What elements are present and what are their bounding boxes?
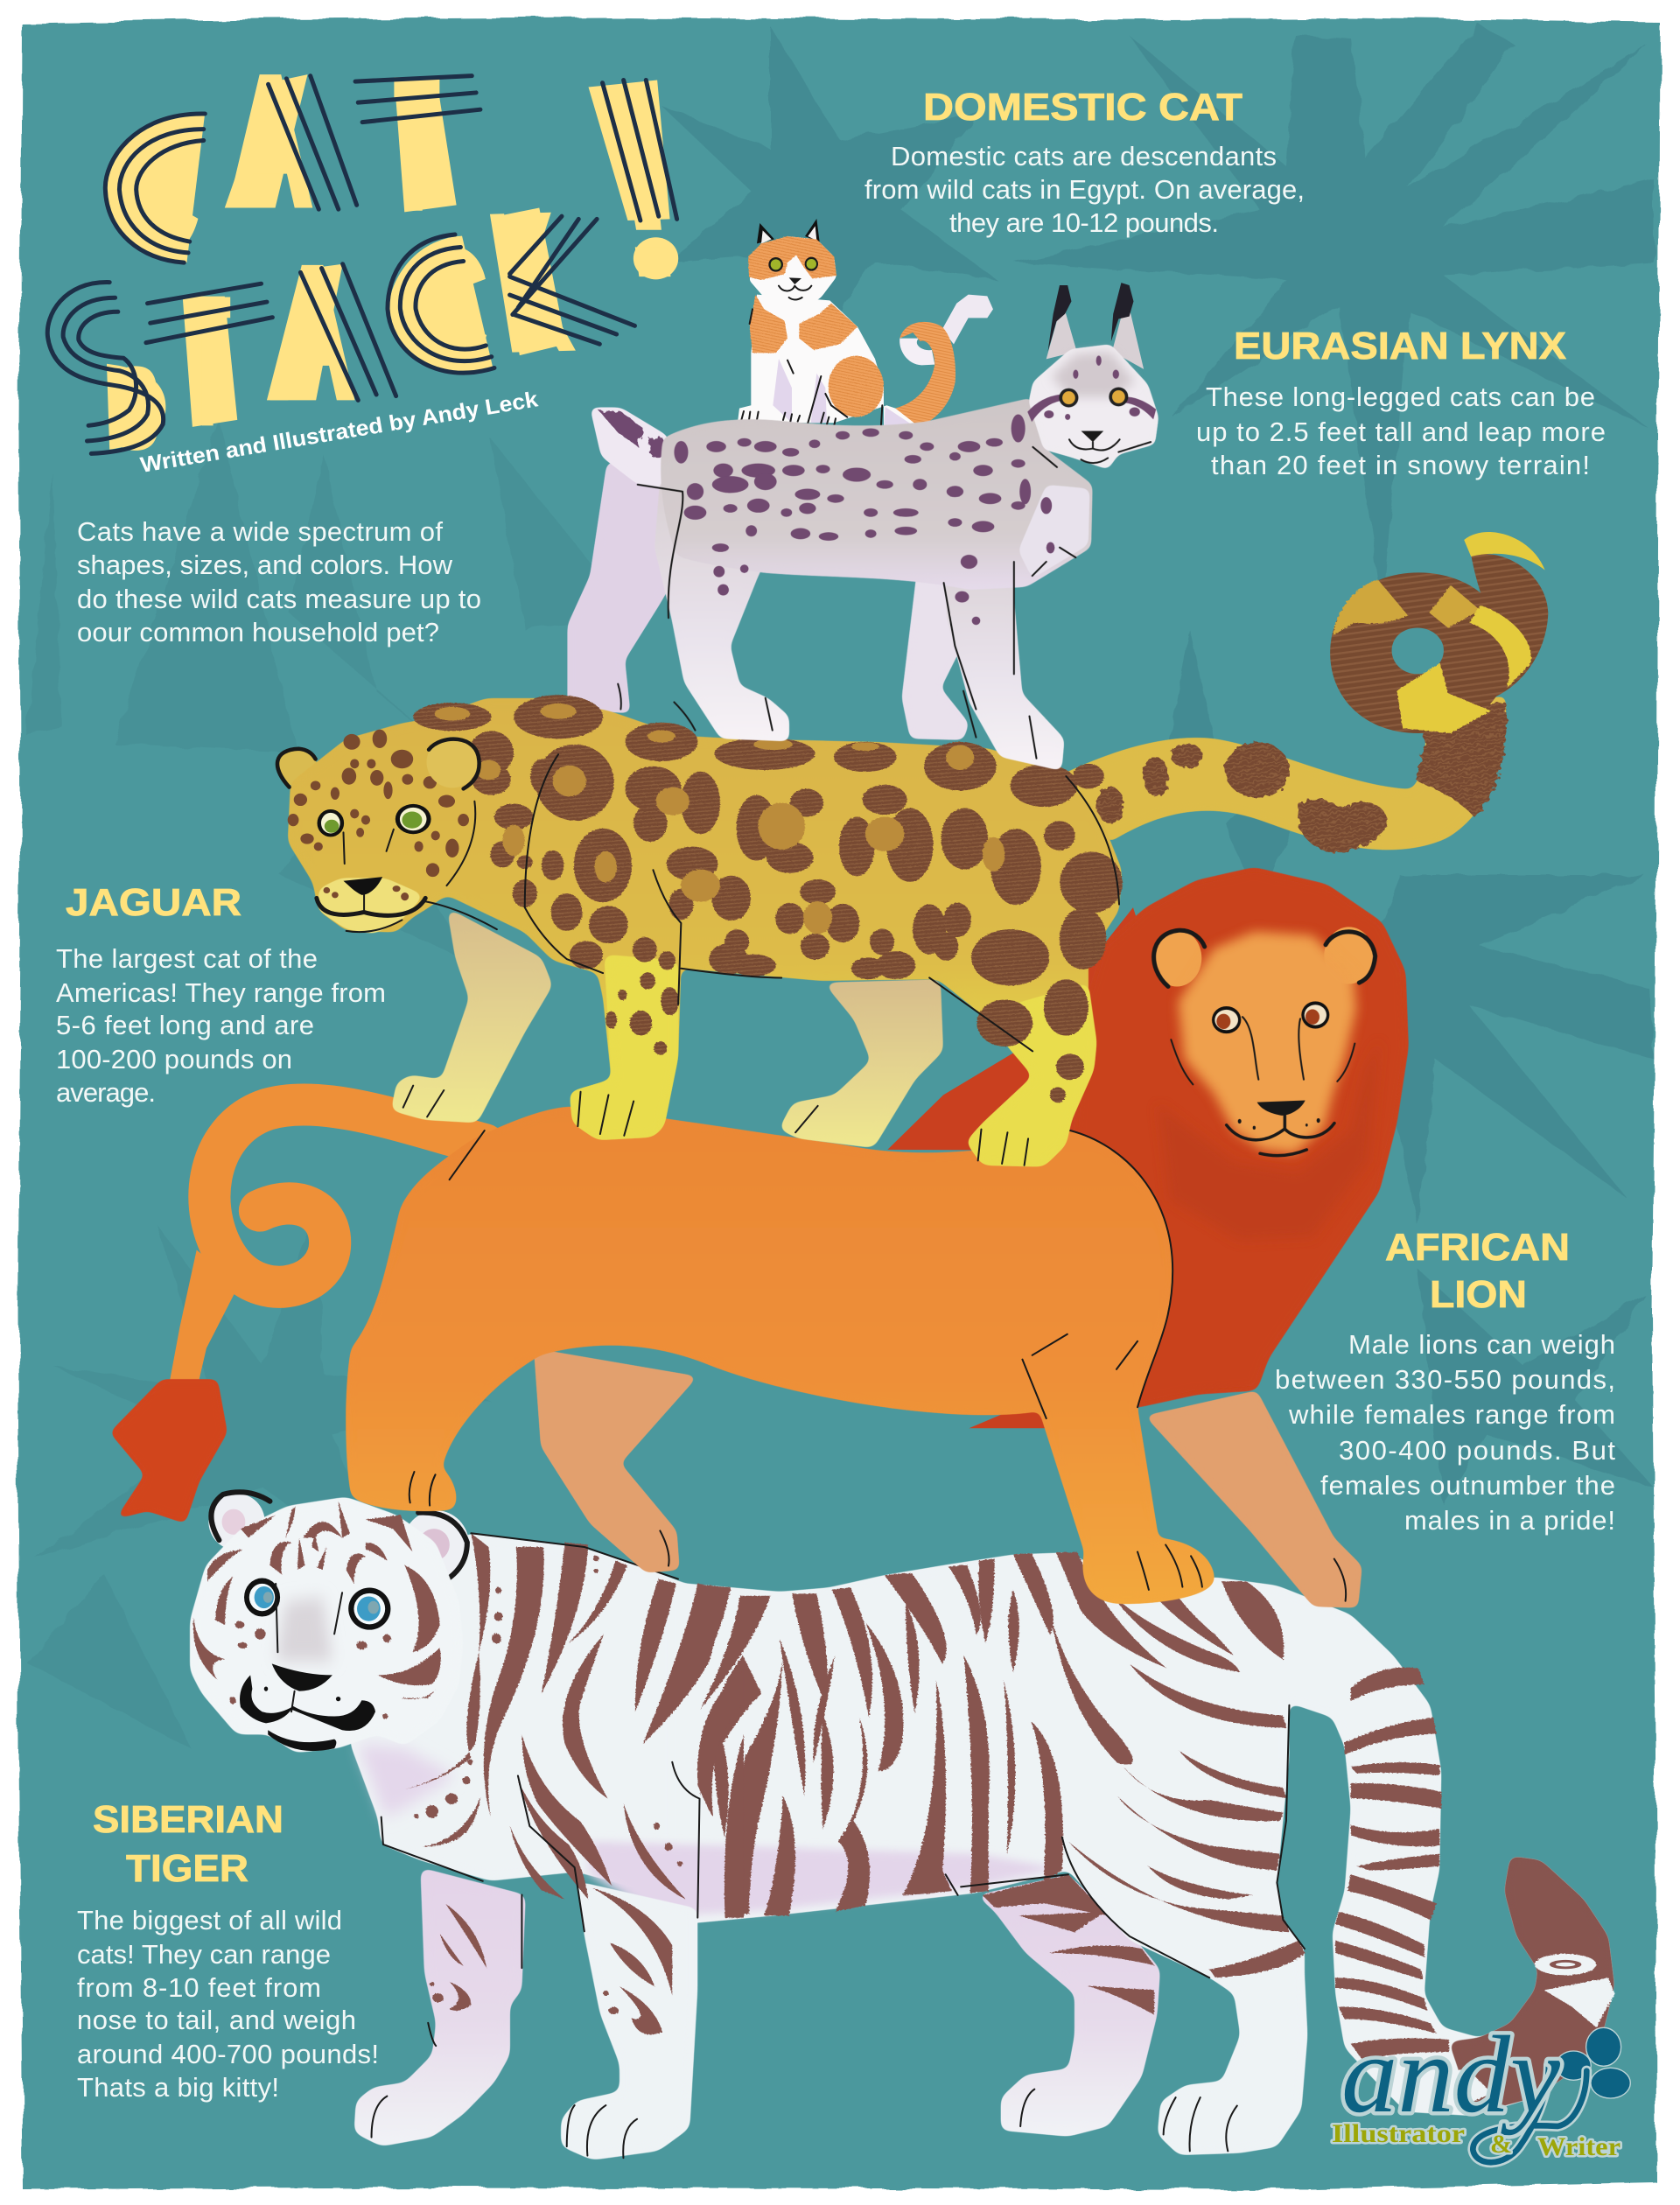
intro text bbox=[77, 516, 481, 648]
lynx chest bbox=[1018, 485, 1089, 578]
lynx forehead bbox=[1052, 352, 1135, 396]
text: domestic cat facts: they are 10-12 pounds. bbox=[949, 207, 1219, 238]
tiger eyes bbox=[244, 1578, 390, 1630]
tiger rear body and tail bbox=[590, 1552, 1614, 2155]
tiger tail tip bbox=[1449, 1856, 1614, 2114]
lion far legs bbox=[534, 1348, 1362, 1608]
heading: Siberian tiger: TIGER bbox=[126, 1847, 248, 1890]
logo clover bbox=[1557, 2028, 1630, 2097]
tiger front body base bbox=[350, 1533, 718, 1920]
text: jaguar facts: 100-200 pounds on bbox=[56, 1044, 292, 1074]
title letters: C bbox=[399, 210, 490, 406]
intro text: do these wild cats measure up to bbox=[77, 584, 481, 614]
title letters: C bbox=[116, 88, 201, 292]
lynx ears bbox=[1046, 283, 1144, 369]
jaguar head spots bbox=[288, 730, 469, 900]
lion mane wedge behind jaguar bbox=[887, 907, 1211, 1152]
lynx facial stripes bbox=[1027, 355, 1156, 422]
logo: Andy bbox=[1332, 2014, 1630, 2162]
heading: jaguar: JAGUAR bbox=[66, 881, 242, 924]
cat: jaguar bbox=[277, 532, 1548, 1167]
text: tiger facts bbox=[77, 1905, 379, 2103]
text: jaguar facts: 5-6 feet long and are bbox=[56, 1010, 314, 1040]
text: tiger facts: cats! They can range bbox=[77, 1939, 331, 1970]
text: jaguar facts: Americas! They range from bbox=[56, 977, 386, 1008]
title letters: A bbox=[267, 223, 358, 443]
tiger near front leg bbox=[561, 1881, 697, 2160]
lion nose and mouth bbox=[1171, 1017, 1354, 1156]
text: lynx facts: up to 2.5 feet tall and leap more bbox=[1196, 416, 1606, 447]
jaguar rosettes bbox=[413, 695, 1123, 1102]
heading: African lion: LION bbox=[1430, 1273, 1527, 1316]
jaguar nose and mouth bbox=[317, 754, 1119, 1166]
text: lion facts bbox=[1275, 1329, 1615, 1536]
text: lynx facts: than 20 feet in snowy terrain! bbox=[1211, 450, 1590, 480]
title ink lines bbox=[47, 76, 677, 453]
tiger far rear leg bbox=[976, 1874, 1160, 2137]
cat: African lion bbox=[109, 867, 1409, 1608]
domestic cat face bbox=[789, 277, 802, 284]
domestic cat orange patches bbox=[750, 295, 884, 417]
cat: Eurasian lynx bbox=[590, 283, 1158, 771]
background palm leaves bbox=[661, 24, 1654, 1505]
logo caption: Writer bbox=[1537, 2132, 1620, 2161]
lion mane shading bbox=[1158, 1040, 1380, 1241]
tiger nose and mouth bbox=[240, 1584, 375, 1751]
lynx far rear leg bbox=[567, 443, 688, 713]
lion lower chest bbox=[969, 1397, 1124, 1428]
text: jaguar facts: The largest cat of the bbox=[56, 943, 318, 974]
text: lion facts: 300-400 pounds. But bbox=[1339, 1435, 1615, 1466]
logo loop bbox=[1473, 2065, 1586, 2162]
tiger tail tip markings bbox=[1424, 1954, 1614, 2112]
lion ears bbox=[1152, 929, 1201, 986]
title letters: T bbox=[393, 35, 440, 252]
logo name: andy bbox=[1341, 2014, 1560, 2136]
tiger muzzle bridge bbox=[276, 1598, 332, 1662]
text: lynx facts bbox=[1196, 382, 1606, 480]
title letters: K bbox=[476, 169, 584, 396]
text: lion facts: while females range from bbox=[1288, 1399, 1615, 1430]
logo caption bbox=[1332, 2119, 1620, 2161]
text: tiger facts: around 400-700 pounds! bbox=[77, 2039, 379, 2069]
faint leaf blades bbox=[26, 420, 630, 1750]
tiger rear leg outlines bbox=[946, 1705, 1305, 1978]
tiger front details and head bbox=[190, 1492, 744, 2160]
text: tiger facts: nose to tail, and weigh bbox=[77, 2005, 356, 2035]
lynx outlines bbox=[618, 485, 1046, 759]
text: lion facts: between 330-550 pounds, bbox=[1275, 1364, 1615, 1395]
intro text: Cats have a wide spectrum of bbox=[77, 516, 443, 547]
title block shapes bbox=[107, 74, 678, 450]
cat: Siberian tiger bbox=[190, 1492, 1614, 2160]
title letters: A bbox=[225, 32, 316, 249]
text: domestic cat facts bbox=[864, 141, 1305, 238]
tiger far front leg bbox=[354, 1867, 526, 2146]
lynx near front leg bbox=[944, 534, 1065, 771]
lion face bbox=[1179, 932, 1356, 1153]
lion ear outlines bbox=[1154, 930, 1376, 986]
domestic cat body bbox=[738, 295, 921, 429]
text: tiger facts: The biggest of all wild bbox=[77, 1905, 342, 1936]
text: lynx facts: These long-legged cats can be bbox=[1206, 382, 1595, 412]
tiger body outlines bbox=[382, 1533, 700, 2046]
text: jaguar facts bbox=[56, 943, 386, 1108]
tiger ears bbox=[208, 1492, 469, 1579]
lynx near rear leg bbox=[654, 478, 789, 741]
jaguar body and head bbox=[288, 698, 1122, 1167]
tiger rear stripes bbox=[700, 1552, 1449, 2061]
heading: Eurasian lynx: EURASIAN LYNX bbox=[1234, 325, 1566, 368]
lion mane bbox=[1041, 867, 1409, 1408]
heading: Siberian tiger: SIBERIAN bbox=[93, 1798, 284, 1841]
jaguar tail bbox=[1060, 695, 1507, 852]
heading: domestic cat: DOMESTIC CAT bbox=[923, 86, 1242, 129]
tiger head bbox=[190, 1496, 463, 1753]
jaguar left ear bbox=[277, 749, 318, 787]
title letters: ! bbox=[590, 73, 699, 325]
title letters: T bbox=[184, 256, 231, 466]
logo caption: Illustrator bbox=[1332, 2119, 1465, 2148]
domestic cat head bbox=[749, 236, 836, 313]
lion tail bbox=[109, 1104, 485, 1523]
lynx head bbox=[1028, 344, 1158, 470]
domestic cat eyes bbox=[768, 257, 818, 272]
tiger belly shading bbox=[590, 1841, 1059, 1916]
cat: domestic cat bbox=[738, 219, 993, 430]
text: domestic cat facts: Domestic cats are descendants bbox=[891, 141, 1277, 172]
logo loop ink bbox=[1473, 2065, 1586, 2162]
jaguar far legs bbox=[391, 907, 943, 1148]
text: jaguar facts: average. bbox=[56, 1077, 156, 1108]
lion body bbox=[346, 1107, 1214, 1604]
text: lion facts: Male lions can weigh bbox=[1348, 1329, 1615, 1360]
lynx spots bbox=[674, 414, 1054, 625]
tiger front stripes bbox=[404, 1533, 744, 2034]
title letters: S bbox=[109, 342, 161, 475]
tiger face stripes bbox=[193, 1502, 441, 1719]
jaguar muzzle bbox=[318, 878, 424, 934]
byline: Written and Illustrated by Andy Leck bbox=[138, 387, 540, 478]
lynx nose and mouth bbox=[1032, 430, 1151, 557]
logo caption: & bbox=[1490, 2130, 1512, 2159]
lynx far front leg bbox=[901, 569, 976, 740]
jaguar leg highlight bbox=[570, 955, 1097, 1167]
domestic cat tail bbox=[895, 295, 993, 427]
text: tiger facts: Thats a big kitty! bbox=[77, 2072, 279, 2103]
intro text: oour common household pet? bbox=[77, 617, 439, 648]
text: lion facts: males in a pride! bbox=[1404, 1505, 1615, 1536]
tiger paw claws bbox=[372, 2096, 637, 2158]
heading: Siberian tiger bbox=[93, 1798, 284, 1890]
text: lion facts: females outnumber the bbox=[1320, 1470, 1615, 1501]
lynx tail bbox=[590, 407, 688, 492]
jaguar eyes bbox=[318, 804, 431, 836]
jaguar right ear bbox=[277, 737, 480, 788]
title letters bbox=[109, 32, 699, 475]
heading: African lion bbox=[1385, 1226, 1570, 1316]
lion eyes bbox=[1212, 1001, 1329, 1033]
lynx eyes bbox=[1059, 388, 1128, 408]
title: Cat Stack! bbox=[47, 32, 699, 475]
domestic cat ears bbox=[757, 219, 820, 243]
lion outlines and claws bbox=[410, 1130, 1346, 1601]
text: domestic cat facts: from wild cats in Egypt. On average, bbox=[864, 174, 1305, 205]
jaguar tail ring bbox=[1330, 532, 1548, 733]
lynx body bbox=[661, 397, 1093, 590]
text: tiger facts: from 8-10 feet from bbox=[77, 1972, 321, 2003]
intro text: shapes, sizes, and colors. How bbox=[77, 550, 453, 580]
heading: African lion: AFRICAN bbox=[1385, 1226, 1570, 1269]
tiger neck shading bbox=[358, 1744, 456, 1817]
